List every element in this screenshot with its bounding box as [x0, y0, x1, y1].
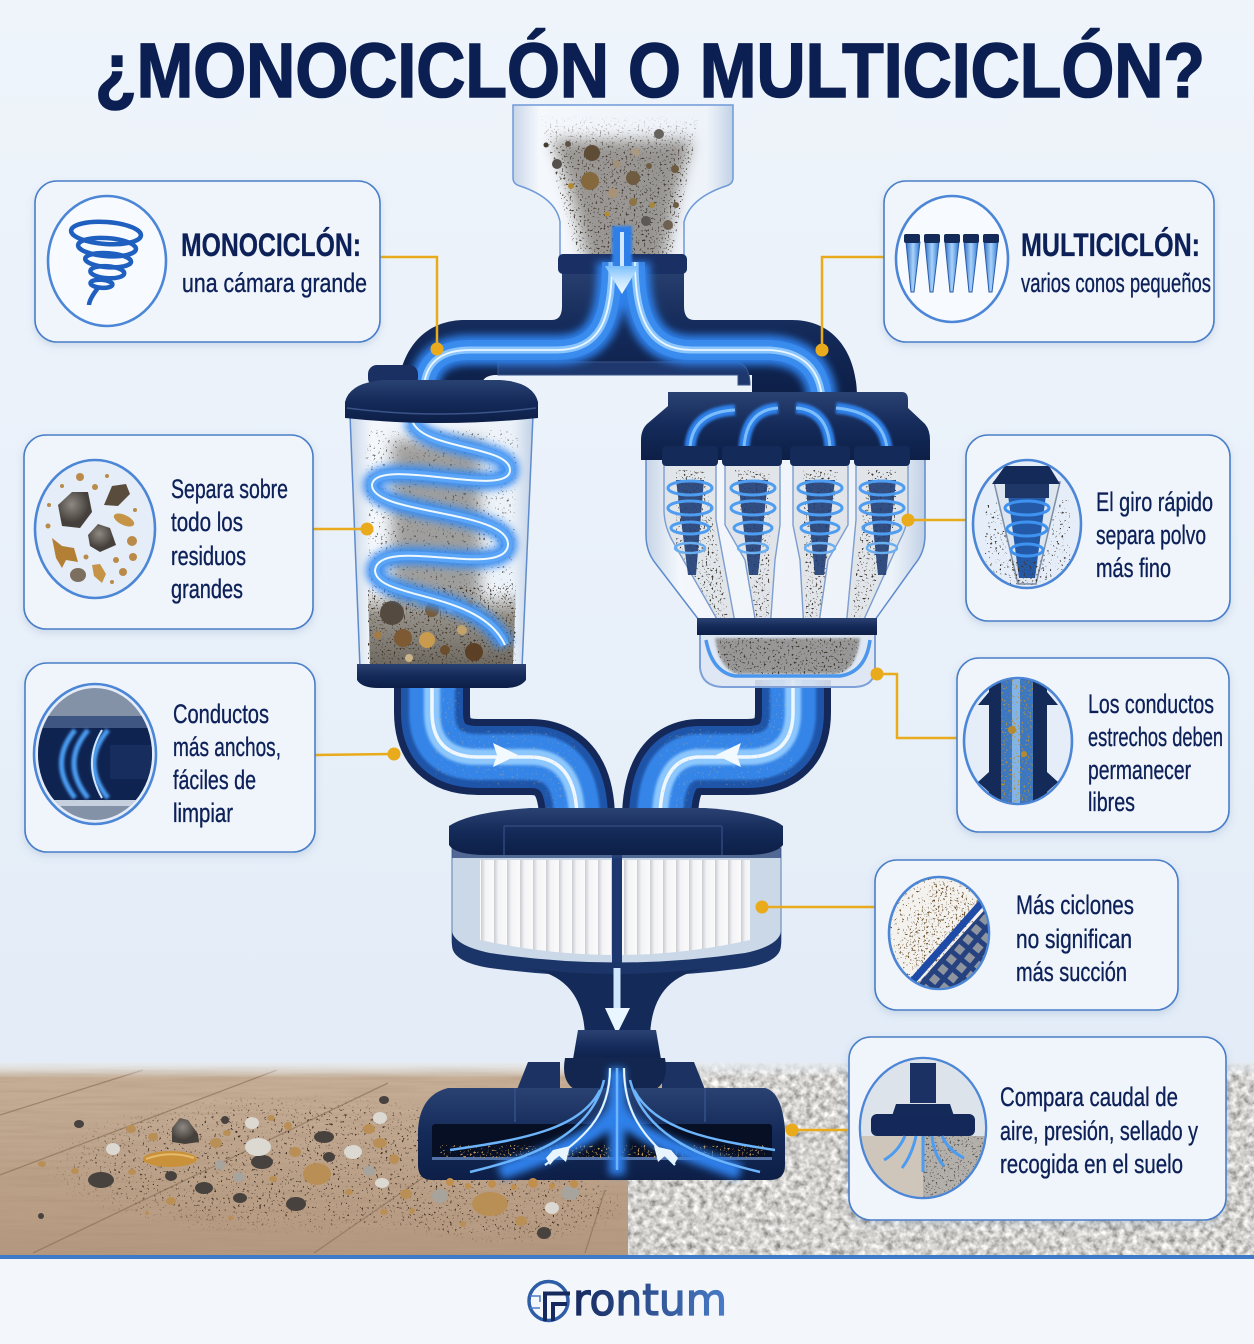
- heading: MONOCICLÓN:: [181, 227, 361, 263]
- icon: mini nozzle: [860, 1058, 986, 1198]
- manifold airflow: [690, 380, 887, 448]
- nozzle body: [418, 1088, 785, 1180]
- outer glass: [646, 455, 925, 624]
- dust cloud: [552, 140, 692, 280]
- text: fáciles de: [173, 765, 256, 795]
- text: [171, 474, 288, 604]
- text: [1016, 890, 1134, 987]
- text: [1088, 689, 1223, 817]
- wood floor: [0, 1062, 720, 1255]
- text: residuos: [171, 541, 246, 571]
- intake opening: [432, 1124, 772, 1160]
- chamber base: [357, 664, 526, 688]
- right intake arrow: [654, 1146, 678, 1165]
- text: [173, 699, 281, 828]
- icon: dust on mesh: [889, 877, 989, 989]
- chamber glass: [350, 415, 533, 668]
- canister base: [452, 932, 781, 976]
- text: recogida en el suelo: [1000, 1149, 1183, 1179]
- panel: conductos anchos: [25, 663, 315, 852]
- canister rim: [452, 848, 781, 858]
- stem to nozzle: [525, 968, 710, 1040]
- pleated media: [480, 860, 750, 955]
- nozzle shoulders: [516, 1062, 706, 1092]
- logo: [529, 1275, 727, 1326]
- cone 1: [662, 446, 736, 628]
- text: más fino: [1096, 553, 1171, 583]
- icon: wide duct: [30, 684, 160, 824]
- cone 3: [790, 446, 850, 630]
- filter canister: [452, 848, 781, 976]
- text: El giro rápido: [1096, 487, 1213, 517]
- multicyclone unit: [641, 380, 930, 687]
- text: Separa sobre: [171, 474, 288, 504]
- panel: monociclón: [35, 181, 380, 342]
- debris pile: [368, 590, 516, 664]
- monocyclone chamber: [345, 365, 538, 688]
- text: [1000, 1082, 1198, 1179]
- carpet: [628, 1062, 1254, 1255]
- text: más succión: [1016, 957, 1127, 987]
- text: más anchos,: [173, 732, 281, 762]
- left intake arrow: [546, 1146, 570, 1165]
- down arrow: [605, 226, 639, 294]
- inlet tube with falling dust: [513, 105, 733, 285]
- floor: [0, 1062, 1254, 1255]
- panel: más ciclones: [875, 860, 1178, 1010]
- text: [1096, 487, 1213, 583]
- text: grandes: [171, 574, 243, 604]
- panel: giro rápido: [966, 435, 1230, 621]
- stem arrow: [605, 1008, 630, 1034]
- text: limpiar: [173, 798, 233, 828]
- panel: conductos estrechos: [957, 658, 1229, 832]
- text: separa polvo: [1096, 520, 1206, 550]
- text: no significan: [1016, 924, 1132, 954]
- cone 2: [722, 446, 782, 630]
- floor fade: [0, 1062, 700, 1078]
- floor nozzle: [418, 1030, 785, 1190]
- top duct airflow: [424, 262, 822, 398]
- text: libres: [1088, 787, 1135, 817]
- top T duct: [398, 226, 857, 398]
- debris under nozzle: [446, 1178, 578, 1190]
- text: Más ciclones: [1016, 890, 1134, 920]
- lower ducts to filter: [432, 680, 793, 820]
- icon: rocks and leaves: [35, 460, 155, 598]
- dust bin: [697, 618, 877, 687]
- heading: MULTICICLÓN:: [1021, 227, 1200, 263]
- icon: tornado: [48, 196, 166, 326]
- panel: multiciclón: [884, 181, 1214, 342]
- text: una cámara grande: [182, 268, 367, 298]
- logo wordmark: rontum: [573, 1275, 727, 1326]
- right duct: [660, 680, 793, 820]
- text: Conductos: [173, 699, 269, 729]
- dust rocks: [544, 129, 679, 230]
- icon: small cones: [896, 196, 1008, 322]
- footer: [0, 1255, 1254, 1344]
- text: Compara caudal de: [1000, 1082, 1178, 1112]
- left duct: [432, 680, 577, 820]
- nozzle collar: [572, 1030, 662, 1065]
- panel: compara: [849, 1037, 1226, 1220]
- filter lid: [449, 808, 783, 855]
- text: todo los: [171, 507, 243, 537]
- dust column: [392, 440, 480, 610]
- spiral airflow: [372, 420, 510, 645]
- leader lines: [313, 257, 966, 1136]
- logo mark: [529, 1282, 570, 1321]
- chamber lid: [345, 365, 538, 423]
- manifold head: [641, 392, 930, 460]
- cone 4: [846, 446, 910, 628]
- right arrow: [716, 743, 741, 767]
- icon: cone with rings: [973, 460, 1081, 588]
- icon: narrow duct: [964, 678, 1072, 805]
- floor debris: [38, 1093, 630, 1245]
- hepa filter: [449, 808, 783, 976]
- text: permanecer: [1088, 755, 1191, 785]
- panel: residuos grandes: [24, 435, 313, 629]
- left arrow: [493, 743, 518, 767]
- nozzle airflow: [450, 1068, 775, 1175]
